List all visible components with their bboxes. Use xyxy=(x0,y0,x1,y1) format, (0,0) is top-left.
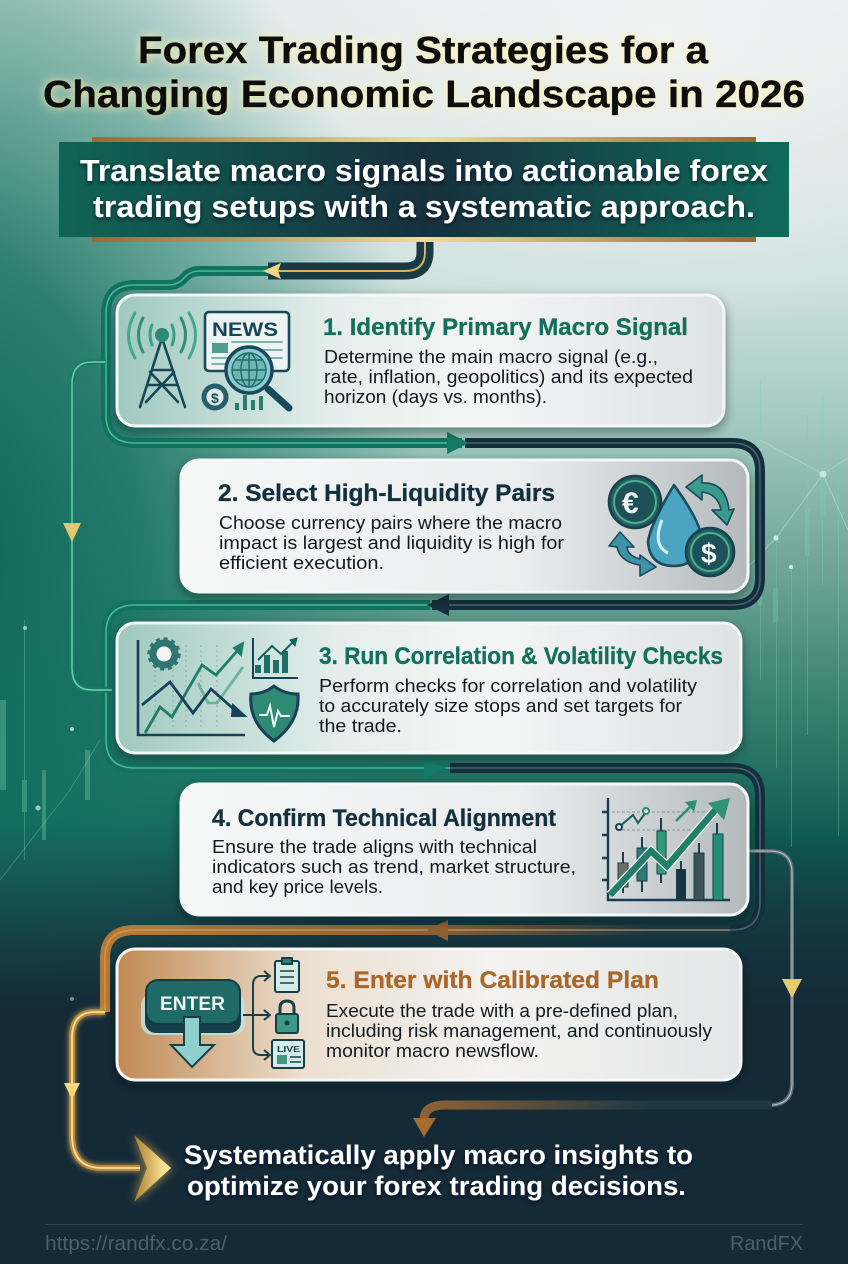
icon: tower and news: $ xyxy=(211,390,219,406)
icon: enter button xyxy=(141,980,245,1067)
title: Forex Trading Strategies for a xyxy=(138,30,709,72)
arrow: thin grey down xyxy=(782,979,802,998)
body text: Choose currency pairs where the macro xyxy=(219,513,562,533)
step 1 card xyxy=(117,295,724,426)
arrow: big gold conclusion xyxy=(134,1135,172,1202)
body text: monitor macro newsflow. xyxy=(326,1041,539,1061)
icon: currency liquidity: $ xyxy=(701,538,717,569)
icon: currency liquidity: € xyxy=(622,487,639,520)
heading: 5. Enter with Calibrated Plan xyxy=(326,967,659,994)
body text: Determine the main macro signal (e.g., xyxy=(324,347,658,367)
body text: impact is largest and liquidity is high for xyxy=(219,533,564,553)
arrow: brown into conclusion xyxy=(413,1118,436,1137)
body text: horizon (days vs. months). xyxy=(324,387,547,407)
connector: banner to step 1 xyxy=(106,242,462,443)
body text: Execute the trade with a pre-defined plan, xyxy=(326,1001,678,1021)
banner: Translate macro signals into actionable forex xyxy=(80,153,769,188)
icon: charts and shield xyxy=(138,638,298,741)
icon: plan branches xyxy=(243,958,304,1068)
heading: 1. Identify Primary Macro Signal xyxy=(323,314,688,341)
connector: step 1 to step 3 loop xyxy=(106,443,760,768)
arrow: thin green down xyxy=(63,523,81,542)
body text: indicators such as trend, market structure, xyxy=(212,857,576,877)
body text xyxy=(324,347,693,407)
body text xyxy=(319,676,697,736)
connector: step 3 to step 5 loop xyxy=(105,768,760,1012)
body text: and key price levels. xyxy=(212,877,383,897)
body text: efficient execution. xyxy=(219,553,384,573)
step 3 card xyxy=(117,623,741,753)
body text xyxy=(219,513,564,573)
title: Changing Economic Landscape in 2026 xyxy=(43,74,805,116)
flow connectors xyxy=(72,242,792,1168)
banner: trading setups with a systematic approach. xyxy=(93,189,755,224)
conclusion: optimize your forex trading decisions. xyxy=(187,1171,686,1201)
body text: Ensure the trade aligns with technical xyxy=(212,837,537,857)
body text xyxy=(326,1001,712,1061)
heading: 3. Run Correlation & Volatility Checks xyxy=(319,643,723,670)
step 5 card xyxy=(117,949,741,1080)
connector: thin green bypass xyxy=(72,362,112,690)
icon: plan branches: LIVE xyxy=(277,1044,300,1054)
conclusion xyxy=(184,1140,693,1201)
footer: RandFX xyxy=(730,1233,803,1255)
body text xyxy=(212,837,576,897)
arrow: into step 1 xyxy=(263,263,281,279)
arrowheads xyxy=(63,263,802,1202)
arrow: step 4 left xyxy=(427,920,448,941)
connector: thin grey bypass to conclusion xyxy=(424,851,792,1120)
arrow: gold down xyxy=(64,1083,80,1099)
conclusion: Systematically apply macro insights to xyxy=(184,1140,693,1170)
icon: currency liquidity xyxy=(609,475,734,576)
icon: enter button: ENTER xyxy=(160,994,225,1015)
arrow: step 2 left xyxy=(427,594,449,616)
body text: Perform checks for correlation and volatility xyxy=(319,676,697,696)
footer xyxy=(45,1224,803,1255)
arrow: step 3 right xyxy=(424,757,446,779)
icon: tower and news xyxy=(128,312,289,410)
step 2 card xyxy=(181,460,748,592)
heading: 2. Select High-Liquidity Pairs xyxy=(218,480,555,507)
heading: 4. Confirm Technical Alignment xyxy=(212,805,556,832)
body text: the trade. xyxy=(319,716,402,736)
icon: candlestick chart xyxy=(602,798,730,900)
body text: to accurately size stops and set targets for xyxy=(319,696,682,716)
connector: gold path to conclusion xyxy=(72,1012,140,1168)
icon: tower and news: NEWS xyxy=(212,320,278,341)
arrow: step 1 right xyxy=(447,432,469,454)
footer: https://randfx.co.za/ xyxy=(45,1233,227,1255)
step 4 card xyxy=(181,784,748,915)
body text: rate, inflation, geopolitics) and its expected xyxy=(324,367,693,387)
body text: including risk management, and continuously xyxy=(326,1021,712,1041)
title xyxy=(43,30,805,116)
banner xyxy=(59,137,789,242)
